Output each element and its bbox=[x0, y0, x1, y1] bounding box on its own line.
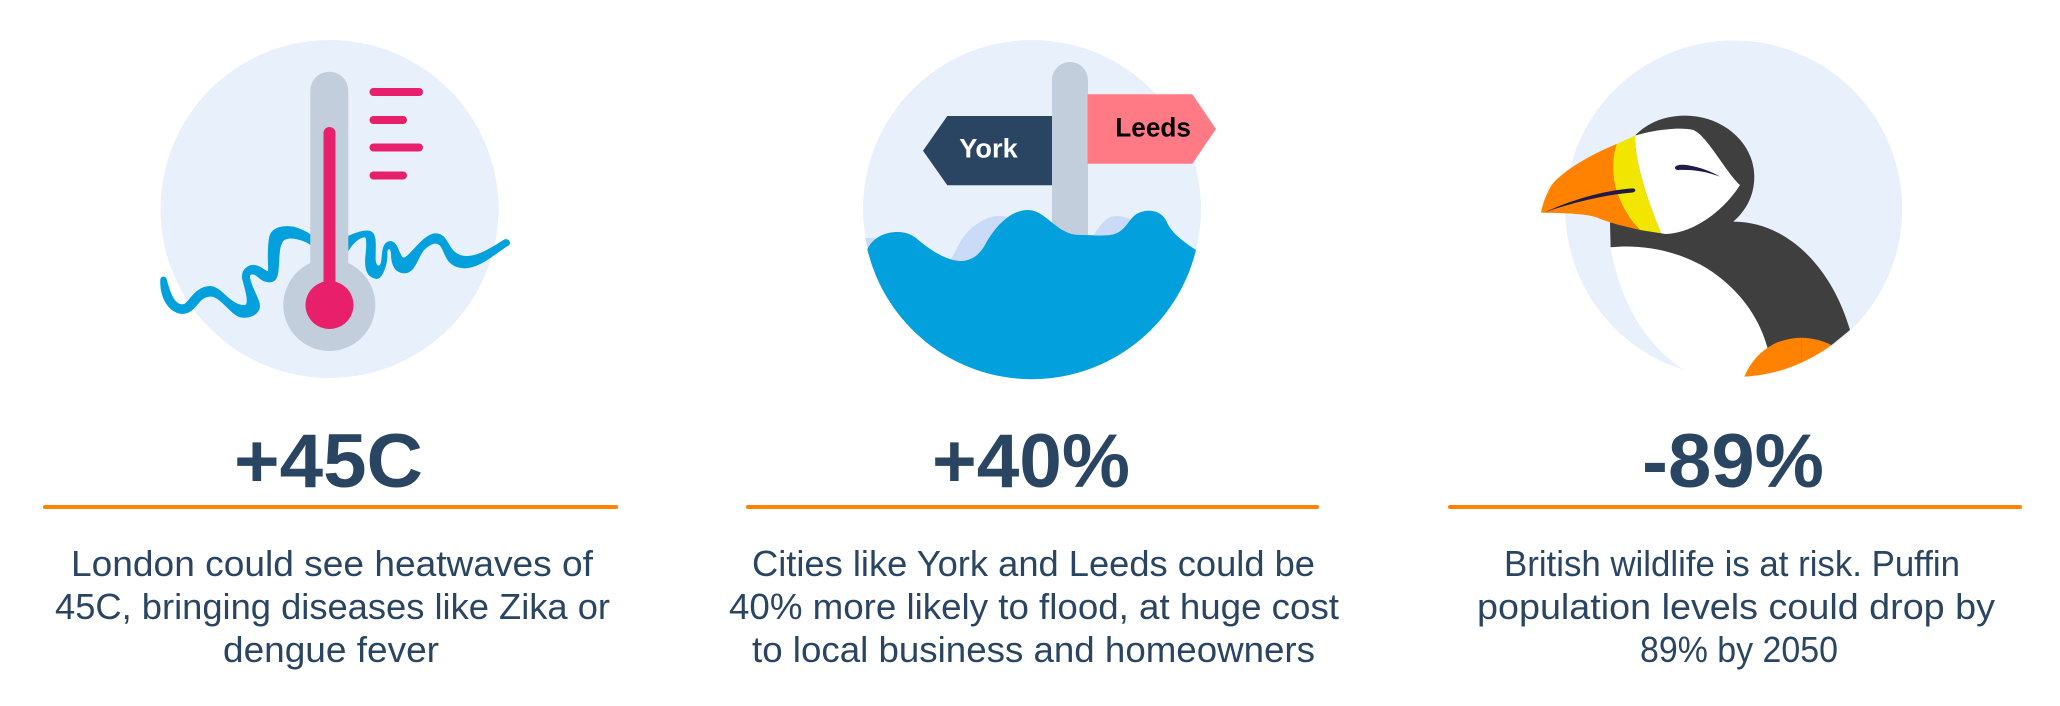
description: flooding: to local business and homeowners bbox=[752, 629, 1315, 670]
thermometer body bbox=[283, 72, 375, 351]
temperature scale ticks bbox=[370, 88, 423, 180]
stat: -89%: -89% bbox=[1642, 419, 1824, 504]
background circle bbox=[160, 40, 498, 378]
heat wave line bbox=[161, 227, 509, 317]
stat: +40%: +40% bbox=[932, 419, 1130, 504]
orange rule bbox=[43, 505, 618, 509]
sign: York bbox=[923, 116, 1052, 185]
puffin orange foot bbox=[1744, 338, 1832, 377]
sign: Leeds bbox=[1088, 94, 1216, 164]
description: flooding: Cities like York and Leeds could be bbox=[752, 543, 1315, 584]
description: heatwaves: dengue fever bbox=[223, 629, 439, 670]
description: wildlife: 89% by 2050 bbox=[1640, 629, 1838, 670]
icon: puffin bbox=[1541, 40, 1902, 377]
background circle bbox=[863, 40, 1201, 378]
description: heatwaves: 45C, bringing diseases like Zika or bbox=[55, 586, 610, 627]
puffin mouth line bbox=[1544, 188, 1635, 213]
background circle bbox=[1565, 40, 1902, 378]
puffin white belly bbox=[1610, 246, 1822, 378]
panel: heatwaves bbox=[43, 40, 618, 670]
puffin white face bbox=[1635, 129, 1740, 234]
sign: Leeds: Leeds bbox=[1115, 113, 1191, 143]
sign: York: York bbox=[959, 133, 1019, 163]
orange rule bbox=[746, 505, 1319, 509]
panel: wildlife bbox=[1448, 40, 2022, 670]
signpost pole bbox=[1052, 62, 1088, 240]
description: heatwaves bbox=[55, 543, 610, 670]
description: wildlife bbox=[1477, 543, 1995, 670]
puffin eye bbox=[1675, 165, 1720, 177]
description: wildlife: British wildlife is at risk. Puffin bbox=[1504, 543, 1960, 584]
puffin yellow beak band bbox=[1613, 136, 1661, 233]
description: heatwaves: London could see heatwaves of bbox=[71, 543, 594, 584]
stat: +45C: +45C bbox=[234, 419, 423, 504]
panel: flooding bbox=[729, 40, 1339, 670]
description: flooding bbox=[729, 543, 1339, 670]
flood water bbox=[867, 210, 1196, 379]
foot crease bbox=[1801, 338, 1803, 362]
puffin lower edge mask bbox=[1680, 368, 1773, 383]
orange rule bbox=[1448, 505, 2022, 509]
background waves bbox=[865, 216, 1133, 261]
icon: thermometer and heat wave bbox=[160, 40, 509, 378]
description: flooding: 40% more likely to flood, at huge cost bbox=[729, 586, 1339, 627]
description: wildlife: population levels could drop by bbox=[1477, 586, 1995, 627]
thermometer mercury bbox=[306, 127, 354, 329]
puffin black head and wing bbox=[1610, 116, 1850, 348]
puffin orange beak bbox=[1541, 144, 1640, 230]
icon: flooded signpost bbox=[863, 40, 1216, 379]
